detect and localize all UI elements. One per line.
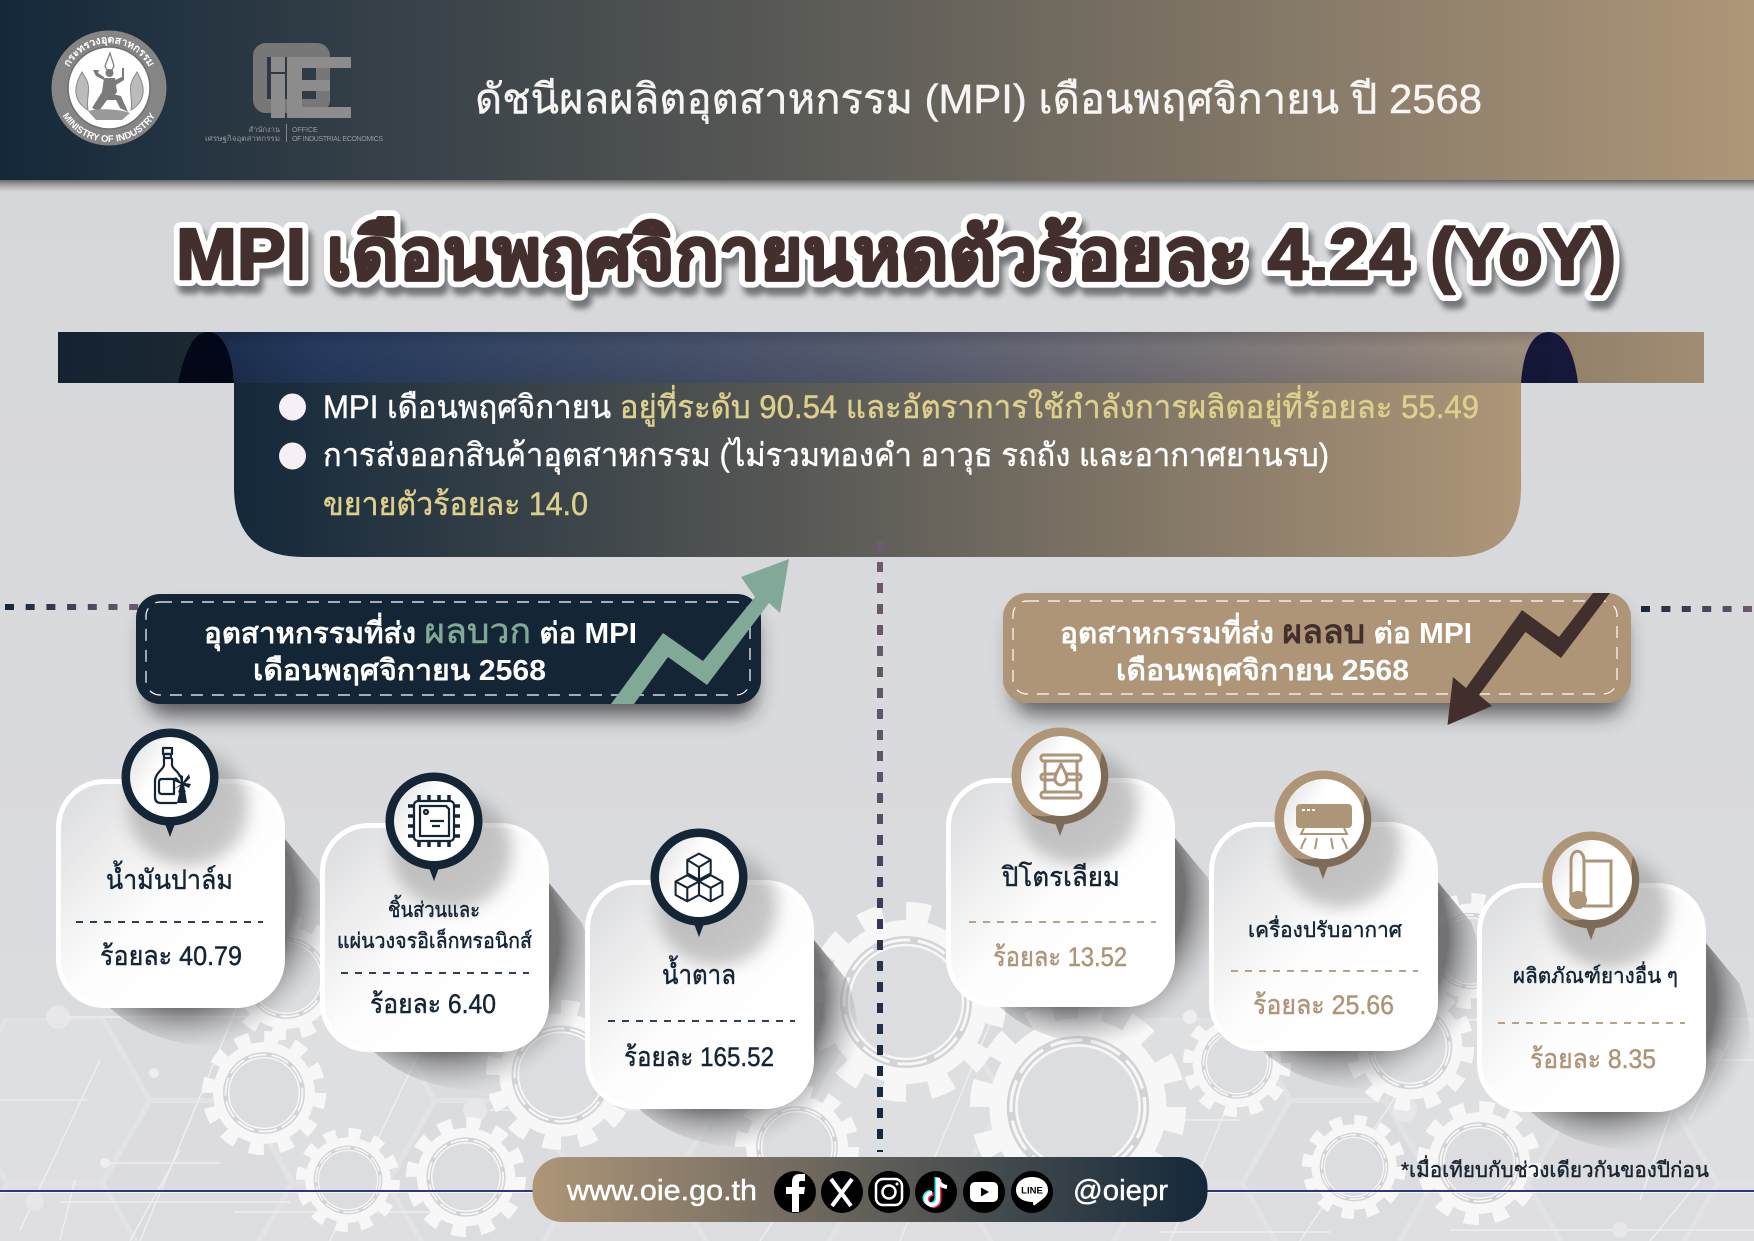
bullet 2: การส่งออกสินค้าอุตสาหกรรม (ไม่รวมทองคำ อาวุธ รถถัง และอากาศยานรบ) bbox=[323, 437, 1329, 475]
card: sugar bbox=[588, 828, 858, 1147]
banner: negative industries bbox=[1003, 593, 1631, 725]
green rising arrow bbox=[611, 559, 789, 704]
header title: ดัชนีผลผลิตอุตสาหกรรม (MPI) เดือนพฤศจิกายน ปี 2568 bbox=[475, 76, 1482, 124]
footer contact pill: www.oie.go.th bbox=[566, 1175, 757, 1207]
icon: YouTube bbox=[963, 1171, 1005, 1213]
banner: positive industries: เดือนพฤศจิกายน 2568 bbox=[253, 655, 546, 687]
left fold bbox=[178, 332, 234, 383]
bullet 2: ขยายตัวร้อยละ 14.0 bbox=[323, 486, 588, 522]
card: other rubber products: ร้อยละ 8.35 bbox=[1530, 1044, 1656, 1074]
main headline: MPI เดือนพฤศจิกายนหดตัวร้อยละ 4.24 (YoY) bbox=[180, 223, 1620, 303]
icon: X bbox=[821, 1171, 863, 1213]
pin with air conditioner icon bbox=[1274, 770, 1372, 879]
footer horizontal rule bbox=[0, 1190, 1754, 1193]
centre dotted divider bbox=[877, 541, 883, 1152]
card: electronic components: แผ่นวงจรอิเล็กทรอนิกส์ bbox=[337, 927, 532, 953]
right dotted connector bbox=[1641, 606, 1754, 612]
card: electronic components bbox=[322, 772, 593, 1090]
bullet 1: MPI เดือนพฤศจิกายน อยู่ที่ระดับ 90.54 และอัตราการใช้กำลังการผลิตอยู่ที่ร้อยละ 55.49 bbox=[323, 385, 1479, 427]
banner: negative industries: อุตสาหกรรมที่ส่ง ผลลบ ต่อ MPI bbox=[1060, 612, 1472, 651]
pin with palm-oil bottle icon bbox=[122, 728, 218, 837]
footer contact pill: @oiepr bbox=[1073, 1175, 1168, 1207]
bullet 2 bbox=[279, 437, 1329, 522]
main headline: MPI เดือนพฤศจิกายนหดตัวร้อยละ 4.24 (YoY) bbox=[176, 215, 1616, 295]
card: sugar: ร้อยละ 165.52 bbox=[624, 1042, 774, 1072]
icon: LINE: LINE bbox=[1021, 1186, 1043, 1196]
card: air conditioner bbox=[1212, 770, 1482, 1089]
logo: Ministry of Industry seal bbox=[52, 30, 166, 146]
logo: Office of Industrial Economics bbox=[205, 50, 383, 143]
logo: Office of Industrial Economics: สำนักงาน bbox=[249, 125, 280, 134]
footer contact pill bbox=[532, 1157, 1208, 1222]
card: other rubber products bbox=[1480, 832, 1750, 1150]
dark falling arrow bbox=[1448, 593, 1610, 725]
icon: TikTok bbox=[915, 1171, 957, 1213]
logo: Ministry of Industry seal: กระทรวงอุตสาหกรรม bbox=[64, 36, 154, 67]
card: sugar: น้ำตาล bbox=[662, 955, 736, 990]
icon: facebook bbox=[774, 1171, 816, 1213]
card: air conditioner: ร้อยละ 25.66 bbox=[1253, 990, 1394, 1020]
banner: negative industries: เดือนพฤศจิกายน 2568 bbox=[1116, 655, 1409, 687]
pin with rubber roll icon bbox=[1542, 832, 1640, 940]
card: petroleum bbox=[948, 728, 1219, 1045]
card: palm oil bbox=[58, 728, 329, 1046]
icon: LINE bbox=[1011, 1171, 1053, 1213]
card: petroleum: ปิโตรเลียม bbox=[1002, 862, 1120, 892]
header bar bbox=[0, 0, 1754, 190]
logo: Office of Industrial Economics: เศรษฐกิจอุตสาหกรรม bbox=[205, 134, 280, 143]
left dotted connector bbox=[5, 604, 140, 610]
summary ribbon panel bbox=[58, 332, 1704, 557]
logo: Office of Industrial Economics: OF INDUSTRIAL ECONOMICS bbox=[292, 136, 383, 143]
icon: Instagram bbox=[868, 1171, 910, 1213]
card: palm oil: ร้อยละ 40.79 bbox=[100, 941, 242, 971]
logo: Office of Industrial Economics: OFFICE bbox=[292, 127, 318, 134]
banner: positive industries bbox=[136, 559, 789, 716]
banner: positive industries: อุตสาหกรรมที่ส่ง ผลบวก ต่อ MPI bbox=[204, 612, 637, 651]
card: electronic components: ร้อยละ 6.40 bbox=[370, 989, 496, 1019]
pin with circuit chip icon bbox=[386, 772, 482, 881]
logo: Ministry of Industry seal: MINISTRY OF INDUSTRY bbox=[62, 112, 154, 142]
card: air conditioner: เครื่องปรับอากาศ bbox=[1248, 915, 1403, 942]
right fold bbox=[1521, 332, 1578, 383]
card: petroleum: ร้อยละ 13.52 bbox=[993, 942, 1127, 972]
footnote: *เมื่อเทียบกับช่วงเดียวกันของปีก่อน bbox=[1401, 1155, 1709, 1182]
main headline: MPI เดือนพฤศจิกายนหดตัวร้อยละ 4.24 (YoY) bbox=[176, 215, 1616, 295]
pin with oil barrel icon bbox=[1012, 728, 1108, 836]
card: other rubber products: ผลิตภัณฑ์ยางอื่น ๆ bbox=[1513, 961, 1678, 988]
card: palm oil: น้ำมันปาล์ม bbox=[106, 860, 233, 895]
pin with sugar cubes icon bbox=[650, 828, 748, 937]
card: electronic components: ชิ้นส่วนและ bbox=[388, 895, 480, 922]
